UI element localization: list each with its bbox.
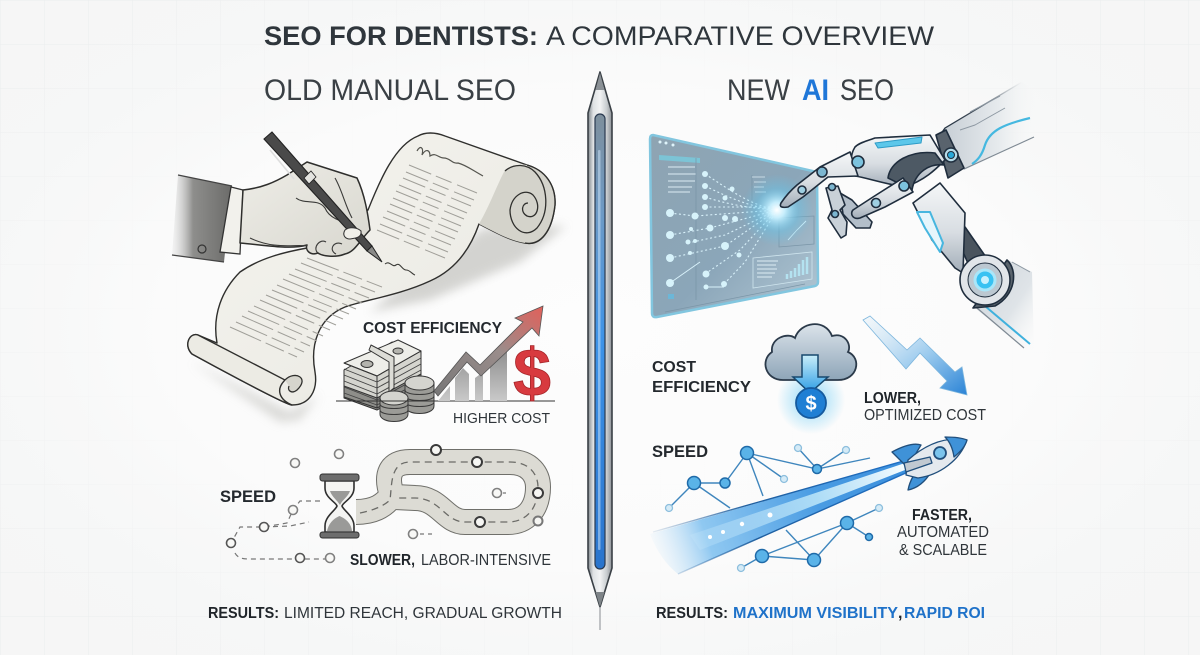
results: new: MAXIMUM VISIBILITY <box>733 605 898 622</box>
icon: cloud with dollar coin: $ <box>805 393 817 415</box>
rising arrow <box>434 306 543 396</box>
panel: new AI SEO <box>650 74 1038 622</box>
icon: cloud with dollar coin <box>765 324 856 434</box>
network lines <box>670 174 777 284</box>
heading: old manual SEO: OLD MANUAL SEO <box>264 74 516 107</box>
road checkpoints <box>431 445 543 527</box>
icon: hourglass <box>320 474 359 538</box>
red dollar sign: $ <box>513 335 551 411</box>
scroll text lines <box>377 165 477 258</box>
results: old: LIMITED REACH, GRADUAL GROWTH <box>284 605 562 622</box>
lower arm <box>974 260 1034 350</box>
index finger <box>780 152 858 207</box>
back fingers <box>840 193 872 228</box>
cost efficiency label: COST EFFICIENCY <box>363 320 502 337</box>
faster label: & SCALABLE <box>899 542 987 559</box>
coins <box>380 376 434 422</box>
speed label: SPEED <box>652 442 708 461</box>
slower label: LABOR-INTENSIVE <box>421 552 551 569</box>
heading: new AI SEO: NEW <box>727 74 791 107</box>
results: new: RAPID ROI <box>904 605 985 622</box>
bottom roll <box>188 335 292 405</box>
lower cost label: LOWER, <box>864 390 921 407</box>
faster label: AUTOMATED <box>897 524 989 541</box>
lower cost label: OPTIMIZED COST <box>864 407 986 424</box>
hand <box>240 162 370 256</box>
speed label: SPEED <box>220 487 276 506</box>
mini charts <box>753 252 812 288</box>
cost efficiency label: COST <box>652 359 696 376</box>
icon: robotic arm <box>780 82 1038 350</box>
dotted path with nodes <box>226 450 506 562</box>
icon: money and rising cost chart <box>336 306 555 422</box>
title: SEO FOR DENTISTS: <box>264 21 538 51</box>
higher cost label: HIGHER COST <box>453 410 550 427</box>
bars <box>438 350 507 401</box>
icon: falling cost arrow <box>863 316 967 395</box>
icon: rocket <box>892 437 967 490</box>
heading: new AI SEO: AI <box>802 74 829 107</box>
pen <box>264 132 382 262</box>
faster label: FASTER, <box>912 507 972 524</box>
elbow joint <box>973 260 1014 308</box>
middle finger <box>826 186 847 238</box>
top roll spiral <box>479 165 555 243</box>
forearm <box>960 227 988 268</box>
rocket trail <box>650 460 908 574</box>
sleeve and cuff <box>172 175 232 262</box>
money stack <box>344 340 421 410</box>
title: A COMPARATIVE OVERVIEW <box>546 21 935 51</box>
results: new: RESULTS: <box>656 605 728 622</box>
panel: old manual SEO <box>172 74 566 622</box>
results: new: , <box>898 605 902 622</box>
central divider <box>588 72 612 630</box>
wrist joint <box>936 130 964 178</box>
icon: holographic dashboard <box>650 135 818 317</box>
upper arm <box>938 82 1038 170</box>
scroll paper <box>188 133 555 405</box>
winding road <box>356 445 543 527</box>
thumb <box>852 178 913 218</box>
network graph <box>666 444 882 572</box>
slower label: SLOWER, <box>350 552 415 569</box>
results: old: RESULTS: <box>208 605 279 622</box>
baseline <box>336 400 555 402</box>
palm <box>851 135 945 187</box>
heading: new AI SEO: SEO <box>840 74 894 107</box>
illustration: scroll and writing hand <box>172 132 566 422</box>
cost efficiency label: EFFICIENCY <box>652 379 751 396</box>
